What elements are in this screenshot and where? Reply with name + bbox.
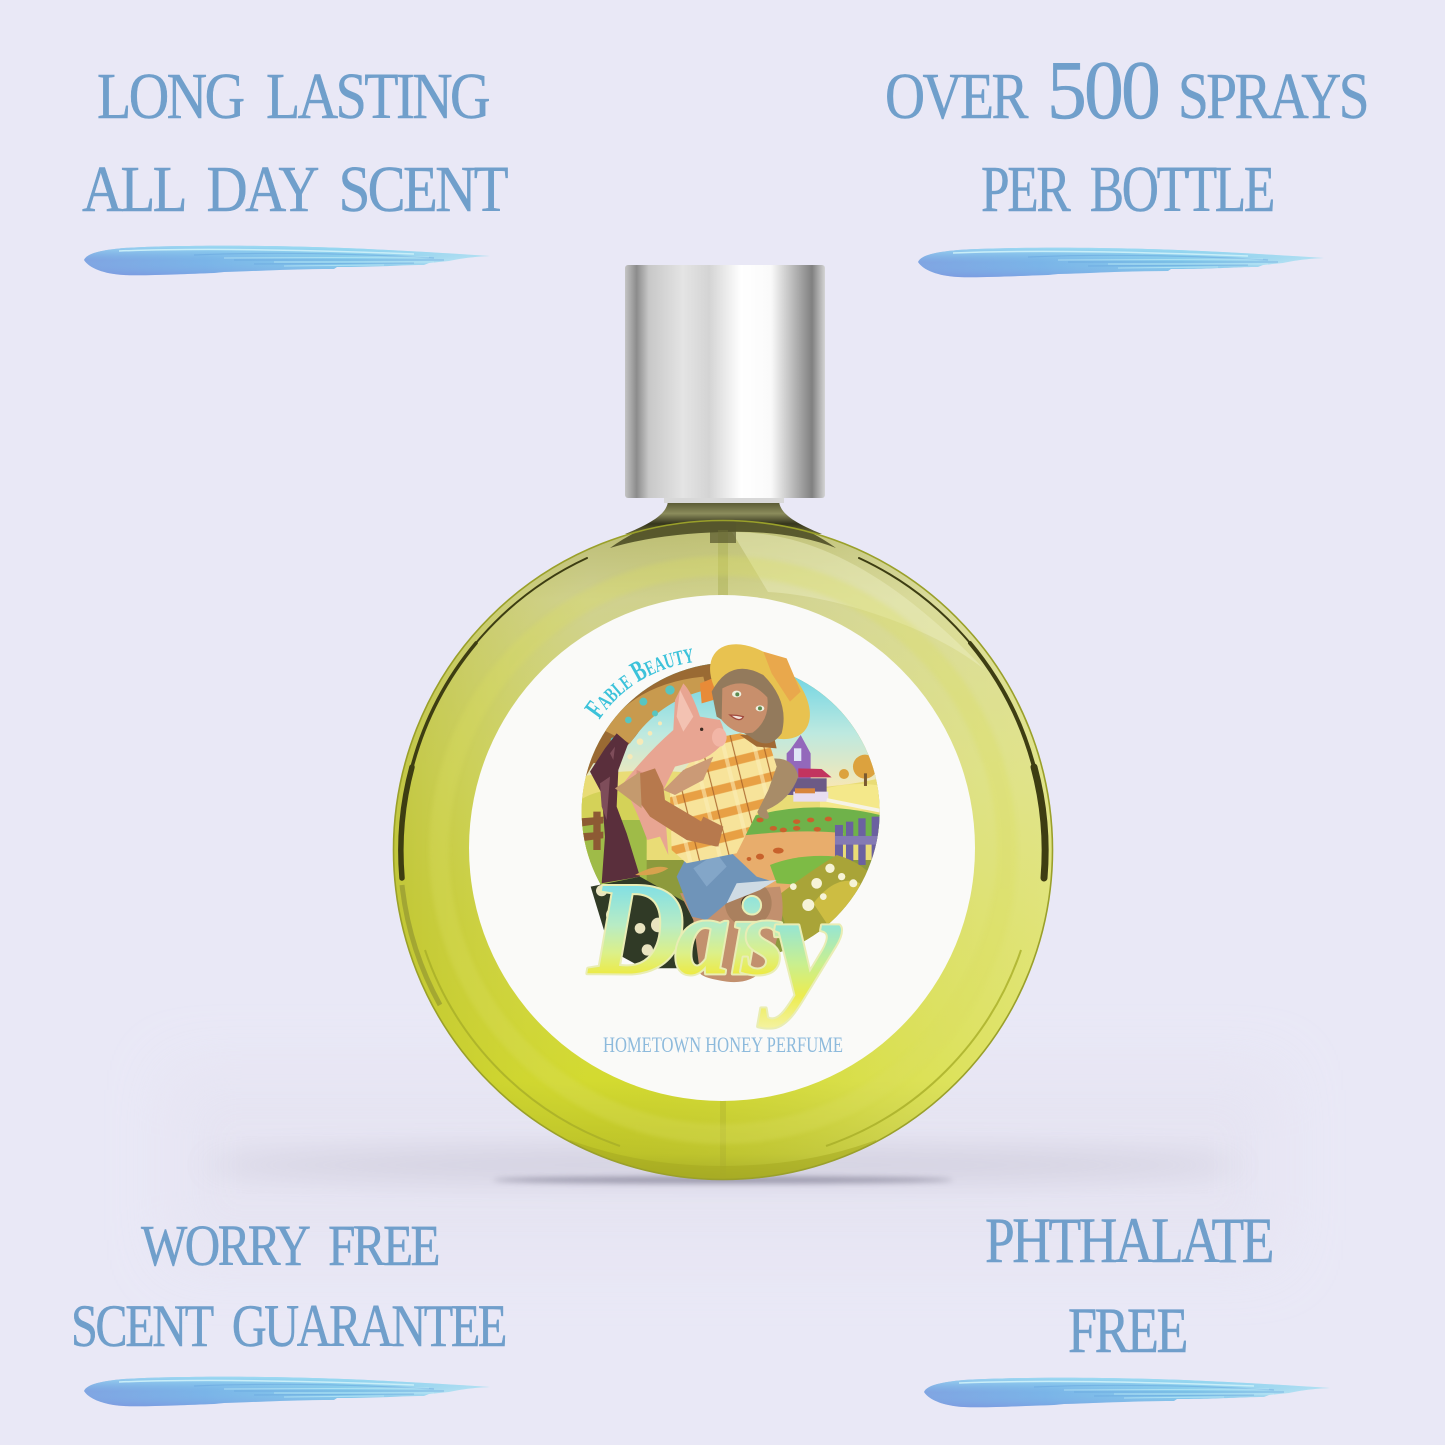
- feature: long lasting all day scent: [82, 60, 508, 275]
- chest: [663, 757, 713, 795]
- shoulder shadow: [610, 521, 836, 548]
- heading: scent guarantee: SCENT GUARANTEE: [71, 1293, 505, 1359]
- floor shadow: [203, 1147, 1243, 1184]
- bottle neck: [625, 500, 822, 534]
- heading: over 500 sprays: [885, 44, 1367, 137]
- barn: [783, 735, 832, 802]
- product name: daisy: s: [741, 875, 784, 997]
- white label: [469, 595, 975, 1101]
- grass patch: [770, 856, 837, 887]
- heading: worry free: WORRY FREE: [141, 1213, 438, 1278]
- pig: [623, 683, 727, 855]
- feature: worry free scent guarantee: [71, 1213, 505, 1406]
- label caption: HOMETOWN HONEY PERFUME: [603, 1032, 843, 1057]
- foliage: [586, 664, 712, 777]
- purple gate: [835, 817, 882, 865]
- perfume bottle: [392, 265, 1054, 1180]
- hills: [580, 771, 887, 860]
- plaid shirt: [670, 733, 777, 863]
- daisy bush: [781, 855, 868, 942]
- upper glass highlight: [732, 532, 985, 670]
- left dark reflection: [401, 558, 587, 878]
- chickens: [747, 817, 832, 861]
- left field: [582, 820, 647, 884]
- bottle body: [390, 512, 1060, 1190]
- brush stroke: [84, 1377, 490, 1406]
- brush stroke: [924, 1378, 1330, 1407]
- denim shorts: [677, 848, 773, 920]
- sky: [580, 660, 887, 793]
- silver cap: [625, 265, 825, 498]
- left lower rim band: [402, 885, 440, 1005]
- heading: all day scent: ALL DAY SCENT: [82, 153, 508, 226]
- brush stroke: [84, 246, 490, 275]
- leaf: [635, 867, 668, 875]
- farm scene circle: [580, 660, 887, 963]
- spray tube: [718, 530, 728, 596]
- feature: over 500 sprays per bottle: [885, 44, 1367, 277]
- rim: [394, 520, 1052, 1180]
- grass: [740, 807, 887, 840]
- hair: [712, 669, 784, 743]
- bottom glass base: [570, 1140, 876, 1176]
- white fence: [827, 800, 880, 811]
- thigh: [680, 887, 783, 982]
- sunflower tattoo: [725, 880, 772, 927]
- inner ring: [439, 566, 1007, 1134]
- face: [722, 683, 768, 733]
- waving hair: [757, 759, 798, 819]
- dirt path: [727, 831, 843, 897]
- overflow foliage: [591, 877, 700, 968]
- product name: daisy: D: [587, 854, 685, 1002]
- heading: over 500 sprays: 500: [1047, 44, 1158, 137]
- heading: phthalate: PHTHALATE: [985, 1205, 1272, 1277]
- arms: [615, 768, 720, 847]
- right dark reflection: [859, 558, 1045, 878]
- left fence: [580, 812, 603, 850]
- product name: daisy: ai: [675, 875, 761, 997]
- heading: over 500 sprays: SPRAYS: [1178, 60, 1367, 133]
- brand: fable beauty: Fable Beauty: [584, 648, 692, 720]
- label artwork: [582, 644, 880, 1030]
- brush stroke: [918, 248, 1324, 277]
- heading: long lasting: LONG LASTING: [97, 60, 489, 133]
- collar: [664, 497, 784, 503]
- eyes and mouth: [730, 691, 764, 720]
- feature: phthalate free: [924, 1205, 1330, 1407]
- heading: per bottle: PER BOTTLE: [981, 153, 1274, 226]
- tree trunk: [590, 733, 640, 883]
- scene base: [580, 660, 887, 963]
- heading: free: FREE: [1068, 1295, 1186, 1367]
- shirt knot: [740, 733, 777, 748]
- heading: over 500 sprays: OVER: [885, 60, 1028, 133]
- distant trees: [839, 755, 877, 786]
- floor glow: [170, 1070, 1280, 1260]
- hat: [692, 626, 827, 757]
- product name: daisy: y: [757, 860, 841, 1028]
